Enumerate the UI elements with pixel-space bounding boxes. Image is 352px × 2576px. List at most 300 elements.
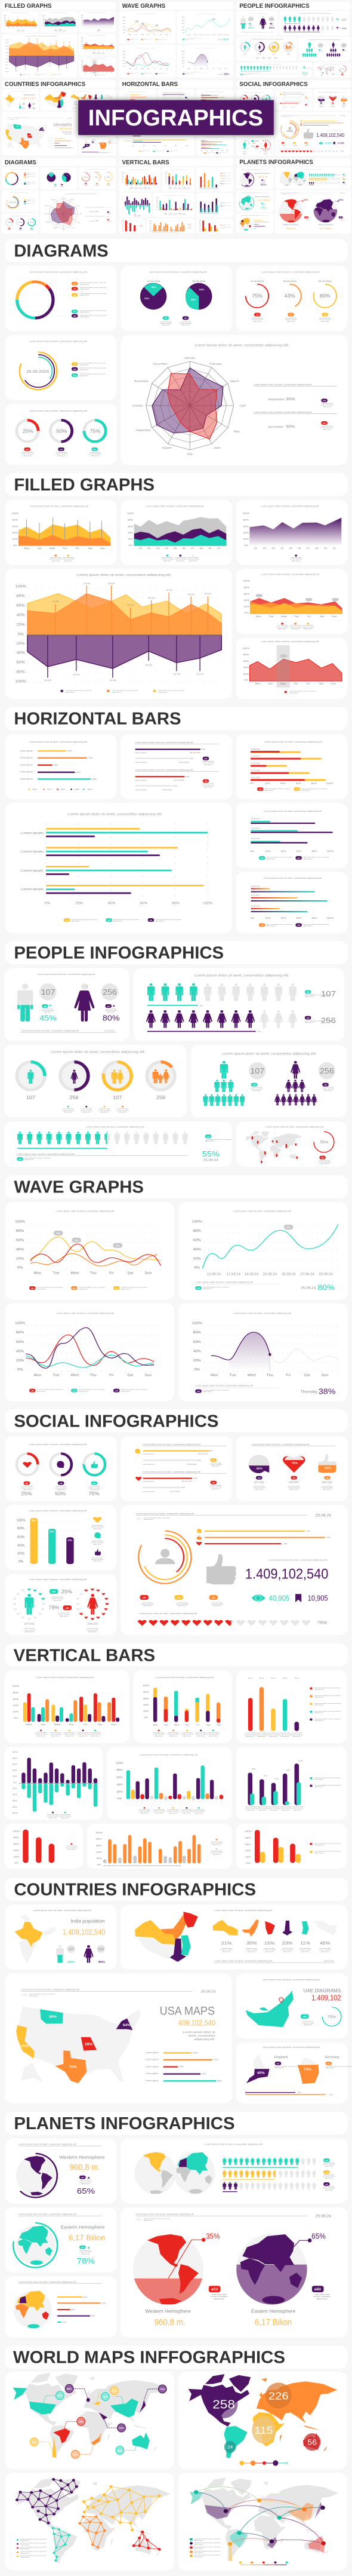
panel: large positive negative area chart: 60% bbox=[17, 604, 25, 608]
panel: china regions: 08.09.2024 bbox=[324, 1960, 334, 1962]
panel: uae map bbox=[236, 1973, 347, 2038]
panel: stacked area chart: 07 bbox=[191, 547, 194, 550]
panel: progress bars with dates: 85% bbox=[202, 748, 206, 750]
panel: progress bars with dates: 83% bbox=[189, 758, 193, 760]
panel: purple highlighted wave chart: Lorem ipsum dolor sit amet, consectetur adipiscing elit. bbox=[195, 1385, 254, 1387]
panel: social progress bars: 08.09.2024 bbox=[198, 1453, 208, 1455]
panel: usa map: 45% bbox=[193, 2052, 199, 2054]
panel: people pyramids: 107 bbox=[250, 1067, 264, 1075]
heading: horizontal bars: HORIZONTAL BARS bbox=[14, 709, 181, 728]
panel: stacked area chart: 04 bbox=[165, 547, 168, 550]
panel: large grouped bars: 0% bbox=[45, 902, 51, 906]
panel: social dashboard: elit bbox=[143, 1596, 146, 1599]
panel: social rings: 75% bbox=[89, 1491, 100, 1496]
panel: teal wave chart: 11.09.24 bbox=[207, 1273, 221, 1276]
panel: progress bars with dates: 45% bbox=[186, 775, 190, 778]
panel: continent globe with bars: 10% bbox=[63, 2321, 67, 2323]
panel: teal wave chart: 17.09.24 bbox=[227, 1273, 240, 1276]
panel: progress bars with dates: 11.09.2024 bbox=[179, 761, 189, 763]
panel: people with heart rings: elit bbox=[52, 1590, 56, 1593]
panel: large hemispheres: 65% bbox=[311, 2232, 326, 2240]
panel: pie charts: 60% bbox=[199, 288, 205, 291]
panel: large grouped bars: Lorem Ipsum. bbox=[21, 832, 44, 835]
preview collage of all sections bbox=[2, 2, 351, 234]
panel: five bars: 45% bbox=[32, 789, 38, 791]
panel: radar chart: March bbox=[230, 380, 239, 383]
panel: progress bars with dates: 28.09.2024 bbox=[174, 779, 184, 781]
panel: teal wave chart: 80% bbox=[317, 1283, 335, 1292]
panel: people rings: 107 bbox=[113, 1094, 122, 1100]
panel: world map with country callouts: 85% bbox=[67, 2387, 72, 2390]
panel: five bars: Lorem ipsum dolor sit amet, consectetur adipiscing elit. bbox=[29, 741, 88, 743]
panel: social progress bars: 10.10.2024 bbox=[170, 1491, 180, 1493]
panel: positive negative bars: 60% bbox=[13, 1800, 18, 1802]
panel: teal purple bars: 11.09.2024 bbox=[251, 827, 260, 830]
panel: people with heart rings: 25% bbox=[61, 1588, 72, 1594]
panel: five bars: 70% bbox=[88, 757, 93, 759]
panel: pictogram rows: 75% bbox=[258, 1031, 261, 1033]
panel: three line wave chart bbox=[5, 1202, 174, 1300]
panel: gradient bars: Lorem ipsum dolor sit amet, consectetur adipiscing elit. bbox=[264, 877, 322, 879]
panel: india: Lorem ipsum dolor sit amet, consectetur adipiscing elit. bbox=[33, 1909, 92, 1912]
panel: india: 80% bbox=[98, 1961, 105, 1964]
panel: wide people row bbox=[5, 1121, 231, 1167]
panel: social rings: Lorem ipsum dolor sit amet, consectetur adipiscing elit. bbox=[29, 1443, 87, 1446]
panel: eastern hemisphere: Eastern Hemisphere bbox=[61, 2225, 105, 2230]
heading: planets infographics: PLANETS INFOGRAPHICS bbox=[14, 2114, 235, 2133]
panel: large positive negative area chart: 02.10 bbox=[174, 673, 181, 676]
panel: positive negative bars: 0% bbox=[13, 1781, 17, 1784]
panel: concentric date rings bbox=[5, 335, 116, 400]
panel: uae map: UAE DIAGRAMS bbox=[304, 1988, 341, 1994]
panel: five tall bars bbox=[236, 1670, 347, 1743]
panel: continent globe with bars bbox=[5, 2277, 116, 2338]
panel: usa map: 64% bbox=[202, 2073, 207, 2075]
panel: gradient bars bbox=[236, 872, 347, 933]
panel: five tall bars: 60 % bbox=[283, 1677, 288, 1679]
preview: horizontal bars bbox=[119, 80, 233, 156]
panel: red yellow paired bars bbox=[236, 1824, 347, 1869]
panel: radar chart: September bbox=[268, 398, 285, 401]
panel: people rings: 107 bbox=[26, 1094, 35, 1100]
panel: social dashboard: 25.09.24 bbox=[316, 1514, 331, 1518]
panel: uae map: 75% bbox=[328, 2015, 336, 2019]
panel: social dashboard: 45% bbox=[283, 1542, 288, 1545]
panel: route map bbox=[178, 2473, 347, 2571]
panel: radar chart: Lorem ipsum dolor sit amet, consectetur adipiscing elit. bbox=[254, 411, 312, 413]
panel: weekly grouped bars: Lorem ipsum dolor sit amet, consectetur adipiscing elit. bbox=[36, 1676, 94, 1679]
panel: network map bbox=[5, 2473, 174, 2571]
panel: large grouped bars: Lorem Ipsum. bbox=[21, 850, 44, 854]
panel: usa map: 409,102,540 bbox=[178, 2019, 215, 2027]
panel: stacked area chart: 06 bbox=[183, 547, 186, 550]
panel: purple highlighted wave chart: Lorem ipsum dolor sit amet, consectetur adipiscing elit. bbox=[233, 1312, 292, 1315]
heading: countries infographics: COUNTRIES INFOGRAPHICS bbox=[14, 1879, 256, 1899]
panel: stacked area chart: 03 bbox=[156, 547, 160, 550]
panel: large positive negative area chart: 10.09 bbox=[84, 582, 91, 585]
panel: usa map: adipiscing elit. bbox=[194, 2038, 215, 2041]
panel: overlapping purple teal bars: 65% bbox=[286, 1769, 291, 1771]
panel: teal wave chart: 25.09.24 bbox=[301, 1287, 316, 1290]
panel: red orange yellow area chart bbox=[236, 569, 347, 634]
panel: social vertical bars: Lorem ipsum dolor sit amet, consectetur adipiscing elit. bbox=[29, 1510, 87, 1512]
panel: india: 107 bbox=[68, 1948, 74, 1951]
heading: wave graphs: WAVE GRAPHS bbox=[14, 1177, 144, 1197]
panel: yellow orange area chart: Lorem ipsum dolor sit amet, consectetur adipiscing elit. bbox=[30, 505, 89, 507]
panel: continent globe with bars: 45% bbox=[84, 2296, 88, 2298]
preview: planets infographics bbox=[236, 158, 351, 234]
panel: pictogram rows: 256 bbox=[321, 1016, 336, 1025]
panel: india bbox=[5, 1905, 116, 1970]
panel: people world map: 75% bbox=[319, 1140, 329, 1145]
panel: purple highlighted wave chart bbox=[178, 1304, 347, 1402]
panel: stacked weekly bars: Lorem ipsum dolor sit amet, consectetur adipiscing elit. bbox=[156, 1676, 214, 1679]
panel: teal wave chart: 22.09.24 bbox=[263, 1273, 277, 1276]
panel: world map with country callouts: 20% bbox=[73, 2453, 78, 2456]
panel: progress bars with dates: Lorem ipsum dolor sit amet, consectetur adipiscing elit. bbox=[135, 769, 194, 771]
panel: world map with country callouts: 30% bbox=[32, 2441, 37, 2443]
panel: three line wave chart: 51% bbox=[75, 1240, 79, 1241]
panel: coloured continents with bubbles: 115 bbox=[254, 2424, 273, 2436]
panel: purple gradient area chart: 09 bbox=[324, 547, 328, 550]
panel: thick percentage rings: 25% bbox=[23, 428, 33, 434]
heading: people infographics bbox=[5, 941, 347, 964]
panel: usa map: Lorem ipsum bbox=[146, 2080, 159, 2082]
panel: overlapping purple teal bars bbox=[236, 1747, 347, 1820]
panel: pie charts: 25.09.2024 bbox=[192, 280, 206, 283]
panel: eastern hemisphere bbox=[5, 2207, 116, 2273]
panel: purple gradient area chart: 05 bbox=[289, 547, 292, 550]
panel: large positive negative area chart: 25.09 bbox=[146, 664, 153, 667]
panel: teal purple bars: 08.09.2024 bbox=[251, 818, 260, 820]
panel: progress bars with dates: Lorem ipsum. bbox=[135, 789, 147, 791]
panel: multicolour column chart: Lorem ipsum dolor sit amet, consectetur adipiscing elit. bbox=[140, 1754, 198, 1756]
heading: diagrams bbox=[5, 239, 347, 262]
panel: overlapping purple teal bars: 40% bbox=[274, 1778, 279, 1780]
panel: five bars: Lorem ipsum bbox=[20, 778, 33, 780]
panel: three line wave chart: 45% bbox=[116, 1245, 120, 1247]
panel: continent globe with bars: 25% bbox=[71, 2308, 75, 2311]
panel: radar chart: 90% bbox=[286, 397, 295, 401]
panel: five bars: 64% bbox=[75, 789, 80, 791]
panel: overlapping bars by date: Lorem ipsum dolor sit amet, consectetur adipiscing elit. bbox=[264, 741, 323, 743]
panel: positive negative bars: 100% bbox=[12, 1751, 18, 1753]
panel: progress bars with dates: Lorem ipsum. bbox=[135, 752, 147, 754]
panel: purple gradient area chart: 03 bbox=[272, 547, 275, 550]
panel: overlapping bars by date: 08.09.2024 bbox=[251, 748, 260, 750]
panel: pie charts: 30% bbox=[152, 286, 157, 289]
section: wave graphs bbox=[5, 1175, 347, 1402]
panel: large hemispheres: Lorem ipsum dolor sit amet, consectetur adipiscing elit. bbox=[136, 2213, 194, 2216]
panel: gradient bars: 28.09.2024 bbox=[251, 905, 260, 907]
panel: uae map: elit bbox=[303, 2015, 307, 2018]
panel: man and woman percentages: 45% bbox=[39, 1014, 57, 1022]
panel: radar chart: 90% bbox=[286, 424, 295, 429]
panel: england germany: 45% bbox=[257, 2072, 265, 2075]
panel: red teal purple wave chart: Lorem ipsum dolor sit amet, consectetur adipiscing elit. bbox=[56, 1312, 115, 1315]
panel: concentric date rings: 25.09.2024 bbox=[26, 369, 49, 374]
panel: social dashboard: elit bbox=[212, 1596, 215, 1599]
panel: social progress bars: Lorem ipsum dolor sit amet, consectetur adipiscing elit. bbox=[143, 1443, 201, 1446]
panel: red area chart with highlight: Lorem ipsum dolor sit amet, consectetur adipiscing elit. bbox=[261, 640, 319, 643]
panel: large positive negative area chart bbox=[5, 569, 232, 699]
panel: stacked weekly bars bbox=[134, 1670, 231, 1743]
panel: five tall bars: 80 % bbox=[260, 1677, 264, 1679]
panel: teal wave chart: 65% bbox=[286, 1226, 291, 1229]
panel: china regions: 15% bbox=[264, 1940, 274, 1946]
panel: usa map bbox=[5, 1973, 232, 2103]
panel: five bars: 25% bbox=[54, 764, 58, 766]
heading: diagrams: DIAGRAMS bbox=[14, 241, 109, 260]
panel: twin globes with people bbox=[121, 2139, 347, 2203]
panel: usa map: 85% bbox=[218, 2080, 223, 2083]
panel: coloured continents with bubbles: 226 bbox=[268, 2391, 289, 2402]
panel: pictogram rows: 45% bbox=[200, 1005, 203, 1007]
panel: social dashboard: 10,905 bbox=[308, 1594, 328, 1602]
panel: western hemisphere: Lorem ipsum dolor sit amet, consectetur adipiscing elit. bbox=[18, 2143, 77, 2146]
panel: social progress bars: 85% bbox=[209, 1450, 214, 1452]
panel: gradient bars: 08.09.2024 bbox=[251, 885, 260, 888]
panel: coloured continents with bubbles: 258 bbox=[212, 2397, 235, 2411]
panel: yellow orange area chart bbox=[5, 500, 116, 565]
panel: world map with country callouts: 60% bbox=[118, 2449, 123, 2452]
preview: people infographics bbox=[236, 2, 351, 77]
panel: large grouped bars: Lorem Ipsum. bbox=[21, 869, 44, 873]
panel: concentric date rings: Lorem ipsum dolor sit amet, consectetur adipiscing elit. bbox=[29, 341, 88, 343]
panel: radar chart: November bbox=[134, 380, 149, 383]
panel: world map with country callouts: 75% bbox=[160, 2388, 165, 2391]
panel: social dashboard: Lorem ipsum dolor sit amet, consectetur adipiscing elit. bbox=[139, 1612, 197, 1615]
panel: overlapping bars by date: 11.09.2024 bbox=[251, 755, 260, 758]
panel: social dashboard: elit bbox=[177, 1596, 181, 1599]
heading: vertical bars bbox=[5, 1643, 347, 1666]
panel: social dashboard: 40,905 bbox=[269, 1594, 289, 1602]
panel: social vertical bars bbox=[5, 1505, 116, 1570]
panel: people world map: Lorem ipsum dolor sit amet, consectetur adipiscing elit. bbox=[265, 1126, 324, 1128]
panel: positive negative bars: 60% bbox=[13, 1764, 18, 1766]
panel: multicolour column chart bbox=[107, 1747, 232, 1820]
panel: england germany: 73% bbox=[304, 2068, 311, 2072]
panel: three line wave chart: 70% bbox=[56, 1232, 60, 1235]
panel: large positive negative area chart: 80% bbox=[17, 670, 25, 674]
panel: wide people row: Lorem ipsum dolor sit amet, consectetur adipiscing elit. bbox=[86, 1126, 144, 1128]
panel: large hemispheres: elit bbox=[314, 2287, 321, 2292]
panel: social progress bars: Lorem ipsum. bbox=[143, 1480, 155, 1483]
panel: pie charts: 11.09.2024 bbox=[147, 280, 160, 283]
panel: pictogram rows: 107 bbox=[321, 990, 336, 999]
panel: large positive negative area chart: 100% bbox=[16, 585, 26, 589]
panel: overlapping purple teal bars: 100% bbox=[298, 1760, 303, 1762]
panel: usa map: 25.09.24 bbox=[201, 1991, 216, 1994]
panel: social dashboard: 79% bbox=[326, 1537, 331, 1539]
panel: stacked area chart: 05 bbox=[174, 547, 177, 550]
panel: radar chart: February bbox=[209, 363, 222, 366]
panel: eastern hemisphere: Lorem ipsum dolor sit amet, consectetur adipiscing elit. bbox=[18, 2213, 77, 2216]
panel: large hemispheres: Eastern Hemisphere bbox=[251, 2308, 295, 2314]
preview: filled graphs bbox=[2, 2, 116, 77]
panel: radar chart bbox=[121, 335, 347, 465]
panel: stacked area chart: 08 bbox=[200, 547, 203, 550]
panel: filled social icons: 75% bbox=[292, 1462, 298, 1465]
panel: large positive negative area chart: 80% bbox=[17, 594, 25, 599]
panel: usa map: Lorem ipsum bbox=[146, 2059, 159, 2061]
section: filled graphs bbox=[5, 473, 347, 699]
panel: large grouped bars: Lorem ipsum dolor sit amet, consectetur adipiscing elit. bbox=[68, 812, 163, 817]
panel: large positive negative area chart: 15.10 bbox=[187, 593, 194, 596]
panel: teal purple bars: 28.09.2024 bbox=[251, 838, 260, 840]
preview: vertical bars bbox=[119, 158, 233, 234]
panel: usa map: Lorem ipsum bbox=[146, 2066, 159, 2068]
banner: infographics title bbox=[78, 100, 274, 135]
preview: social infographics bbox=[236, 80, 351, 155]
section: world maps infographics bbox=[5, 2346, 347, 2571]
panel: teal wave chart bbox=[178, 1202, 347, 1300]
panel: people with heart rings: 78% bbox=[48, 1605, 60, 1611]
panel: social vertical bars: 81% bbox=[50, 1531, 55, 1533]
panel: large positive negative area chart: 100% bbox=[16, 680, 26, 684]
panel: man and woman percentages: Lorem ipsum dolor sit amet, consectetur adipiscing elit. bbox=[38, 973, 96, 976]
panel: england germany: England bbox=[274, 2056, 288, 2059]
panel: five bars: Lorem ipsum bbox=[20, 757, 33, 759]
panel: pictogram rows bbox=[134, 968, 344, 1041]
panel: india: 1.409,102,540 bbox=[63, 1928, 105, 1936]
panel: people rings: 256 bbox=[156, 1094, 165, 1100]
panel: continent globe with bars: 75% bbox=[101, 2302, 106, 2305]
panel: continent globe with bars: Lorem ipsum dolor sit amet, consectetur adipiscing elit. bbox=[18, 2281, 77, 2283]
panel: overlapping bars by date: 05.10.2024 bbox=[251, 769, 260, 772]
panel: india: India population bbox=[70, 1918, 105, 1924]
panel: orange year bars bbox=[87, 1824, 231, 1869]
heading: social infographics bbox=[5, 1409, 347, 1432]
panel: large positive negative area chart: 02.10 bbox=[148, 596, 155, 599]
panel: social progress bars: 63% bbox=[197, 1459, 201, 1462]
panel: radar chart: December bbox=[153, 363, 168, 366]
panel: large positive negative area chart: 10.09 bbox=[73, 673, 80, 676]
panel: five bars: 64% bbox=[76, 771, 81, 774]
panel: stacked area chart bbox=[121, 500, 232, 565]
panel: purple gradient area chart: 01 bbox=[254, 547, 258, 550]
panel: red hatched bars bbox=[5, 1824, 83, 1869]
panel: large positive negative area chart: 0% bbox=[18, 633, 24, 637]
panel: usa map: USA MAPS bbox=[160, 2005, 215, 2017]
panel: five bars: 70% bbox=[47, 789, 52, 791]
panel: large grouped bars: 80% bbox=[172, 902, 180, 906]
panel: large positive negative area chart: 40% bbox=[17, 614, 25, 617]
panel: red teal purple wave chart bbox=[5, 1304, 174, 1402]
panel: england germany: 45% bbox=[297, 2092, 301, 2094]
panel: people rings bbox=[5, 1045, 187, 1117]
panel: social dashboard: Lorem ipsum dolor sit amet, consectetur adipiscing elit. bbox=[136, 1513, 194, 1515]
panel: stacked area chart: Lorem ipsum dolor sit amet, consectetur adipiscing elit. bbox=[146, 505, 204, 507]
panel: stacked area chart: 02 bbox=[147, 547, 151, 550]
panel: large positive negative area chart: 04.09 bbox=[45, 679, 52, 682]
panel: people with heart rings: elit bbox=[66, 1606, 69, 1609]
panel: radar chart: Lorem ipsum dolor sit amet, consectetur adipiscing elit. bbox=[254, 384, 312, 386]
panel: social progress bars: Lorem ipsum. bbox=[143, 1491, 155, 1493]
panel: radar chart: December bbox=[268, 425, 284, 429]
panel: pie charts: Lorem ipsum dolor sit amet, consectetur adipiscing elit. bbox=[149, 271, 208, 274]
panel: large grouped bars: 100% bbox=[203, 902, 213, 906]
panel: large hemispheres: 35% bbox=[206, 2232, 220, 2240]
panel: world map with country callouts: 50% bbox=[119, 2427, 124, 2430]
panel: uae map: Lorem ipsum dolor sit amet, consectetur adipiscing elit. bbox=[263, 1979, 321, 1981]
panel: positive negative bars: 40% bbox=[13, 1793, 18, 1796]
panel: red area chart with highlight bbox=[236, 638, 347, 699]
panel: radar chart: April bbox=[239, 404, 246, 408]
panel: positive negative bars: 40% bbox=[13, 1770, 18, 1772]
panel: overlapping purple teal bars: 60% bbox=[263, 1774, 267, 1777]
panel: continent globe with bars: 64% bbox=[91, 2315, 95, 2317]
panel: purple gradient area chart: 07 bbox=[307, 547, 310, 550]
panel: large hemispheres: 6,17 Bilion bbox=[255, 2318, 292, 2327]
panel: progress arcs: 11.09.2024 bbox=[251, 280, 264, 283]
panel: western hemisphere: Western Hemisphere bbox=[60, 2155, 105, 2160]
preview: diagrams bbox=[2, 158, 116, 234]
panel: india: 256 bbox=[98, 1948, 104, 1951]
panel: social dashboard: 75% bbox=[317, 1620, 327, 1626]
panel: people rings: 256 bbox=[69, 1094, 79, 1100]
section: planets infographics bbox=[12, 2117, 335, 2329]
panel: people pyramids bbox=[191, 1045, 347, 1117]
panel: overlapping purple teal bars: 55% bbox=[252, 1768, 256, 1770]
panel: people pyramids: Lorem ipsum dolor sit amet, consectetur adipiscing elit. bbox=[222, 1052, 317, 1056]
panel: coloured continents with bubbles bbox=[178, 2372, 347, 2469]
panel: purple gradient area chart: 04 bbox=[280, 547, 284, 550]
panel: large positive negative area chart: 04.09 bbox=[52, 600, 59, 603]
section: diagrams bbox=[5, 239, 347, 465]
panel: people with heart rings: Lorem ipsum dolor sit amet, consectetur adipiscing elit. bbox=[29, 1578, 87, 1581]
panel: twin globes with people: Lorem ipsum dolor sit amet, consectetur adipiscing elit. bbox=[205, 2143, 263, 2146]
panel: thick percentage rings bbox=[5, 404, 116, 465]
panel: progress bars with dates bbox=[121, 734, 232, 799]
panel: positive negative bars: 80% bbox=[13, 1758, 18, 1760]
panel: stacked area chart: 09 bbox=[208, 547, 212, 550]
panel: usa map: Lorem ipsum dolor sit amet, consectetur adipiscing elit. bbox=[21, 1989, 80, 1991]
panel: usa map: 24% bbox=[179, 2066, 184, 2068]
panel: radar chart: August bbox=[162, 446, 172, 450]
panel: usa map: Lorem ipsum bbox=[146, 2051, 159, 2054]
panel: segmented donut bbox=[5, 266, 116, 331]
panel: five tall bars: 15 % bbox=[294, 1677, 299, 1679]
panel: overlapping bars by date: 26.09.2024 bbox=[251, 762, 260, 765]
panel: large grouped bars: 60% bbox=[140, 902, 148, 906]
panel: progress arcs: 05.10.2024 bbox=[318, 280, 332, 283]
panel: usa map: 40% bbox=[21, 2045, 29, 2048]
panel: radar chart: September bbox=[135, 429, 151, 433]
panel: progress arcs: 80% bbox=[320, 293, 331, 299]
section: vertical bars bbox=[5, 1643, 347, 1869]
panel: large positive negative area chart: 15.09 bbox=[110, 679, 117, 682]
panel: western hemisphere bbox=[5, 2139, 116, 2203]
panel: orange year bars: 2001 2002 2003 2010 2011 2012 2013 2015 2016 2017 2018 2019 2020 2021 2022 2023 2024 2025 2026 2027 bbox=[103, 1865, 182, 1867]
panel: teal wave chart: 27.09.24 bbox=[300, 1273, 314, 1276]
panel: social progress bars: Lorem ipsum. bbox=[143, 1453, 155, 1455]
panel: purple gradient area chart: Lorem ipsum dolor sit amet, consectetur adipiscing elit. bbox=[261, 505, 319, 507]
panel: positive negative bars: 100% bbox=[12, 1812, 18, 1814]
panel: usa map: Lorem ipsum bbox=[146, 2072, 159, 2075]
panel: uae map: 1.409,102 bbox=[311, 1994, 341, 2002]
panel: england germany bbox=[236, 2043, 351, 2103]
panel: five tall bars: 60 % bbox=[248, 1677, 253, 1679]
panel: teal wave chart: Lorem ipsum dolor sit amet, consectetur adipiscing elit. bbox=[233, 1210, 292, 1213]
panel: people with heart rings: 248,154 bbox=[87, 1623, 98, 1626]
heading: wave graphs bbox=[5, 1175, 347, 1198]
panel: five bars: Lorem ipsum bbox=[20, 771, 33, 773]
panel: china regions: Lorem ipsum dolor sit amet, consectetur adipiscing elit. bbox=[214, 1909, 273, 1912]
panel: large positive negative area chart: 40% bbox=[17, 651, 25, 655]
panel: teal purple bars bbox=[236, 803, 347, 868]
panel: large grouped bars bbox=[5, 803, 232, 933]
